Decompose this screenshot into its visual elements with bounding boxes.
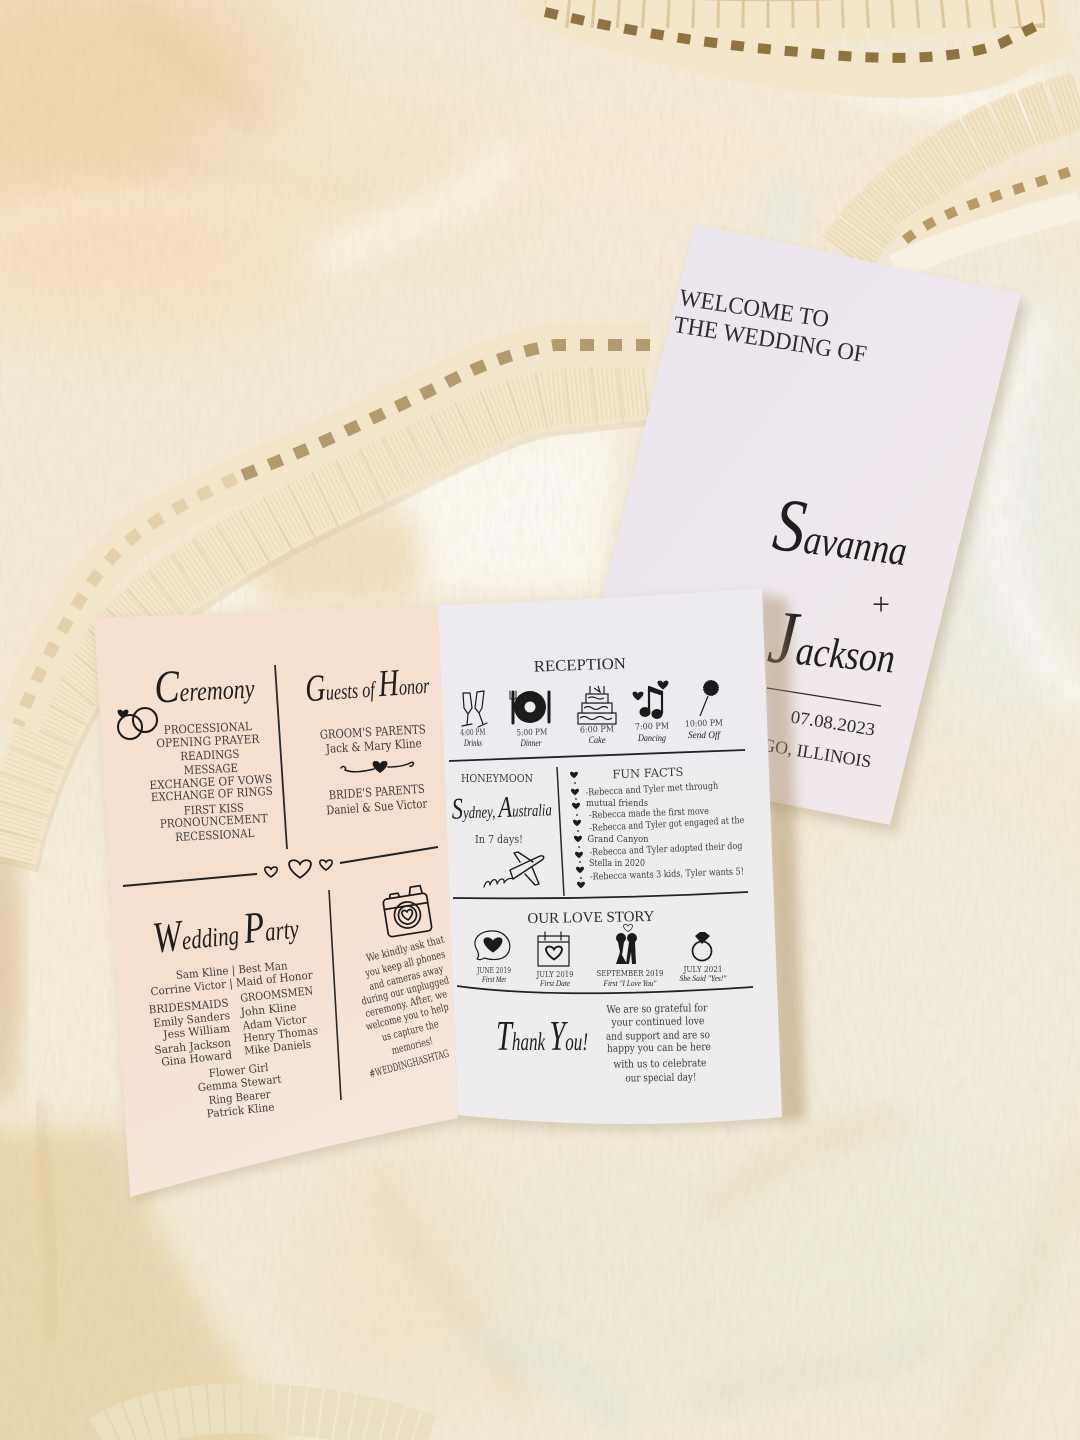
text: order of service: RECESSIONAL <box>175 826 255 844</box>
heading: guests of honor: Guests of Honor <box>304 660 431 710</box>
text: order of service: PROCESSIONAL <box>164 719 252 737</box>
text: party names: Mike Daniels <box>244 1038 312 1057</box>
text: reception times: 10:00 PM <box>685 718 723 730</box>
text: reception times: 7:00 PM <box>635 721 669 733</box>
text: reception times: Dancing <box>637 733 666 743</box>
date and place: GO, ILLINOIS <box>761 735 873 772</box>
icon: camera <box>382 885 432 937</box>
text: gratitude message: with us to celebrate <box>613 1057 707 1071</box>
heading: reception: RECEPTION <box>534 655 627 676</box>
text: party names: Patrick Kline <box>206 1101 275 1121</box>
panel: cover card <box>562 224 1027 833</box>
text: facts list: -Rebecca made the first move <box>589 806 709 821</box>
text: facts list: -Rebecca and Tyler got engaged at the <box>589 815 745 834</box>
panel: reception <box>460 655 723 748</box>
text: love story dates: JULY 2021 <box>683 965 722 975</box>
text: phones request: We kindly ask that <box>365 933 446 965</box>
text: order of service: EXCHANGE OF VOWS <box>149 772 273 792</box>
icon: kissing couple <box>616 924 637 964</box>
divider with three hearts <box>123 847 438 886</box>
text: phones request: memories! <box>390 1035 434 1057</box>
icon: speech bubble with heart <box>475 931 510 960</box>
text: love story dates: She Said "Yes!" <box>680 973 727 983</box>
text: reception times: Cake <box>588 735 606 745</box>
text: order of service: OPENING PRAYER <box>156 732 260 750</box>
text: parents: Daniel & Sue Victor <box>326 796 428 818</box>
text: gratitude message: and support and are so <box>606 1029 710 1043</box>
text: party names: GROOMSMEN <box>240 984 314 1005</box>
text: phones request: during our unplugged <box>360 974 451 1008</box>
text: reception times <box>460 718 723 748</box>
panel: guests of honor <box>304 660 431 818</box>
icon: airplane <box>484 852 544 887</box>
panel: open booklet inner left page <box>94 593 806 1202</box>
text: gratitude message: We are so grateful for <box>606 1002 708 1016</box>
text: love story dates: JULY 2019 <box>536 970 574 980</box>
text: parents <box>319 722 428 818</box>
text: reception times: Send Off <box>688 730 722 740</box>
heading: honeymoon: HONEYMOON <box>461 772 533 785</box>
text: love story dates: First Met <box>481 974 506 984</box>
fringe trim: upper right lace and tassels <box>525 0 1080 268</box>
date and place <box>761 688 881 772</box>
text: facts list: Stella in 2020 <box>589 858 645 869</box>
text: party names: Adam Victor <box>241 1013 308 1032</box>
icon: tiered cake <box>578 686 616 724</box>
panel: our love story <box>475 909 727 988</box>
panel: honeymoon <box>451 772 552 887</box>
icon: music notes with hearts <box>633 681 668 719</box>
text: party names: Henry Thomas <box>243 1024 319 1045</box>
icon: diamond ring <box>692 932 712 960</box>
text: love story dates: JUNE 2019 <box>476 966 511 976</box>
panel: fun facts <box>585 765 745 883</box>
text: phones request: you keep all phones <box>363 948 447 980</box>
text: party names: Corrine Victor | Maid of Honor <box>150 968 314 999</box>
icon: calendar with heart <box>538 932 569 966</box>
text: party names: Gina Howard <box>161 1048 233 1069</box>
text: parents: Jack & Mary Kline <box>324 736 422 756</box>
names: Jackson <box>765 595 900 690</box>
panel: open booklet inner right page <box>438 588 782 1124</box>
text: phones request: us capture the <box>381 1018 440 1044</box>
heading: welcome: THE WEDDING OF <box>672 312 868 368</box>
text: love story dates: SEPTEMBER 2019 <box>596 969 664 979</box>
names <box>765 482 913 690</box>
text: reception times: 4:00 PM <box>460 728 486 738</box>
text: parents: BRIDE'S PARENTS <box>328 782 425 802</box>
text: order of service <box>149 719 273 844</box>
panel: unplugged ceremony note <box>360 885 451 1081</box>
text: phones request: welcome you to help <box>365 1001 450 1033</box>
text: party names: BRIDESMAIDS <box>148 997 229 1016</box>
text: phones request <box>360 933 451 1081</box>
fringe trim: bottom edge tassels <box>103 1408 430 1440</box>
heading: ceremony: Ceremony <box>153 656 255 713</box>
icon: column of hearts <box>570 772 585 888</box>
text: love story dates: First "I Love You" <box>603 978 657 988</box>
panel: ceremony <box>118 656 273 844</box>
text: party names: Emily Sanders <box>153 1009 231 1030</box>
text: party names: Flower Girl <box>208 1061 270 1080</box>
panel: thank you <box>496 1002 711 1085</box>
text: order of service: FIRST KISS <box>183 800 244 818</box>
text: phones request: and cameras away <box>368 963 445 993</box>
tan folded corner at bottom left <box>0 1130 300 1440</box>
text: party names: Jess William <box>162 1021 231 1042</box>
text: party names: John Kline <box>239 1000 297 1019</box>
icon: heart flourish <box>341 761 413 773</box>
text: party names: Gemma Stewart <box>197 1073 283 1094</box>
text: facts list: mutual friends <box>586 798 648 809</box>
text: party names: Sarah Jackson <box>154 1036 232 1057</box>
text: love story dates <box>476 965 727 988</box>
date and place: 07.08.2023 <box>789 707 876 740</box>
heading: fun facts: FUN FACTS <box>612 765 684 781</box>
heading: thank you: Thank You! <box>496 1014 588 1060</box>
text: order of service: EXCHANGE OF RINGS <box>151 784 273 804</box>
text: countdown: In 7 days! <box>475 833 523 846</box>
text: party names: Sam Kline | Best Man <box>175 959 288 983</box>
text: phones request: ceremony. After, we <box>364 988 448 1020</box>
heading: welcome: WELCOME TO <box>677 285 831 333</box>
text: order of service: MESSAGE <box>184 761 238 777</box>
text: reception times: 5:00 PM <box>516 727 548 739</box>
heading: welcome <box>672 285 868 368</box>
icon: plate and cutlery <box>510 691 549 723</box>
text: parents: GROOM'S PARENTS <box>319 722 426 742</box>
heading: wedding party: Wedding Party <box>150 899 301 963</box>
text: love story dates: First Date <box>539 978 570 988</box>
text: facts list: Grand Canyon <box>588 834 648 845</box>
text: party names: Ring Bearer <box>208 1088 272 1107</box>
heading: our love story: OUR LOVE STORY <box>527 909 655 927</box>
text: destination: Sydney, Australia <box>451 789 552 826</box>
text: order of service: READINGS <box>180 747 240 763</box>
text: facts list <box>585 781 745 883</box>
icon: wedding rings <box>118 708 157 739</box>
text: facts list: -Rebecca and Tyler met through <box>585 781 719 798</box>
text: reception times: Dinner <box>520 738 542 748</box>
text: reception times: Drinks <box>463 738 482 748</box>
icon: champagne glasses <box>462 691 487 727</box>
text: phones request: #WEDDINGHASHTAG <box>368 1048 450 1081</box>
panel: wedding party <box>148 899 319 1121</box>
text: facts list: -Rebecca wants 3 kids, Tyler wants 5! <box>590 866 744 883</box>
icon: sparkler <box>700 680 719 716</box>
text: gratitude message: your continued love <box>610 1015 705 1029</box>
text: gratitude message: our special day! <box>625 1071 697 1085</box>
names: Savanna <box>769 482 913 582</box>
fringe trim: lower diagonal lace and tassels <box>4 345 650 865</box>
names: + <box>872 586 890 622</box>
text: gratitude message <box>606 1002 711 1085</box>
text: gratitude message: happy you can be here <box>607 1041 711 1055</box>
text: facts list: -Rebecca and Tyler adopted their dog <box>589 841 743 858</box>
text: party names <box>148 959 319 1121</box>
text: order of service: PRONOUNCEMENT <box>159 811 268 831</box>
text: reception times: 6:00 PM <box>580 724 614 736</box>
